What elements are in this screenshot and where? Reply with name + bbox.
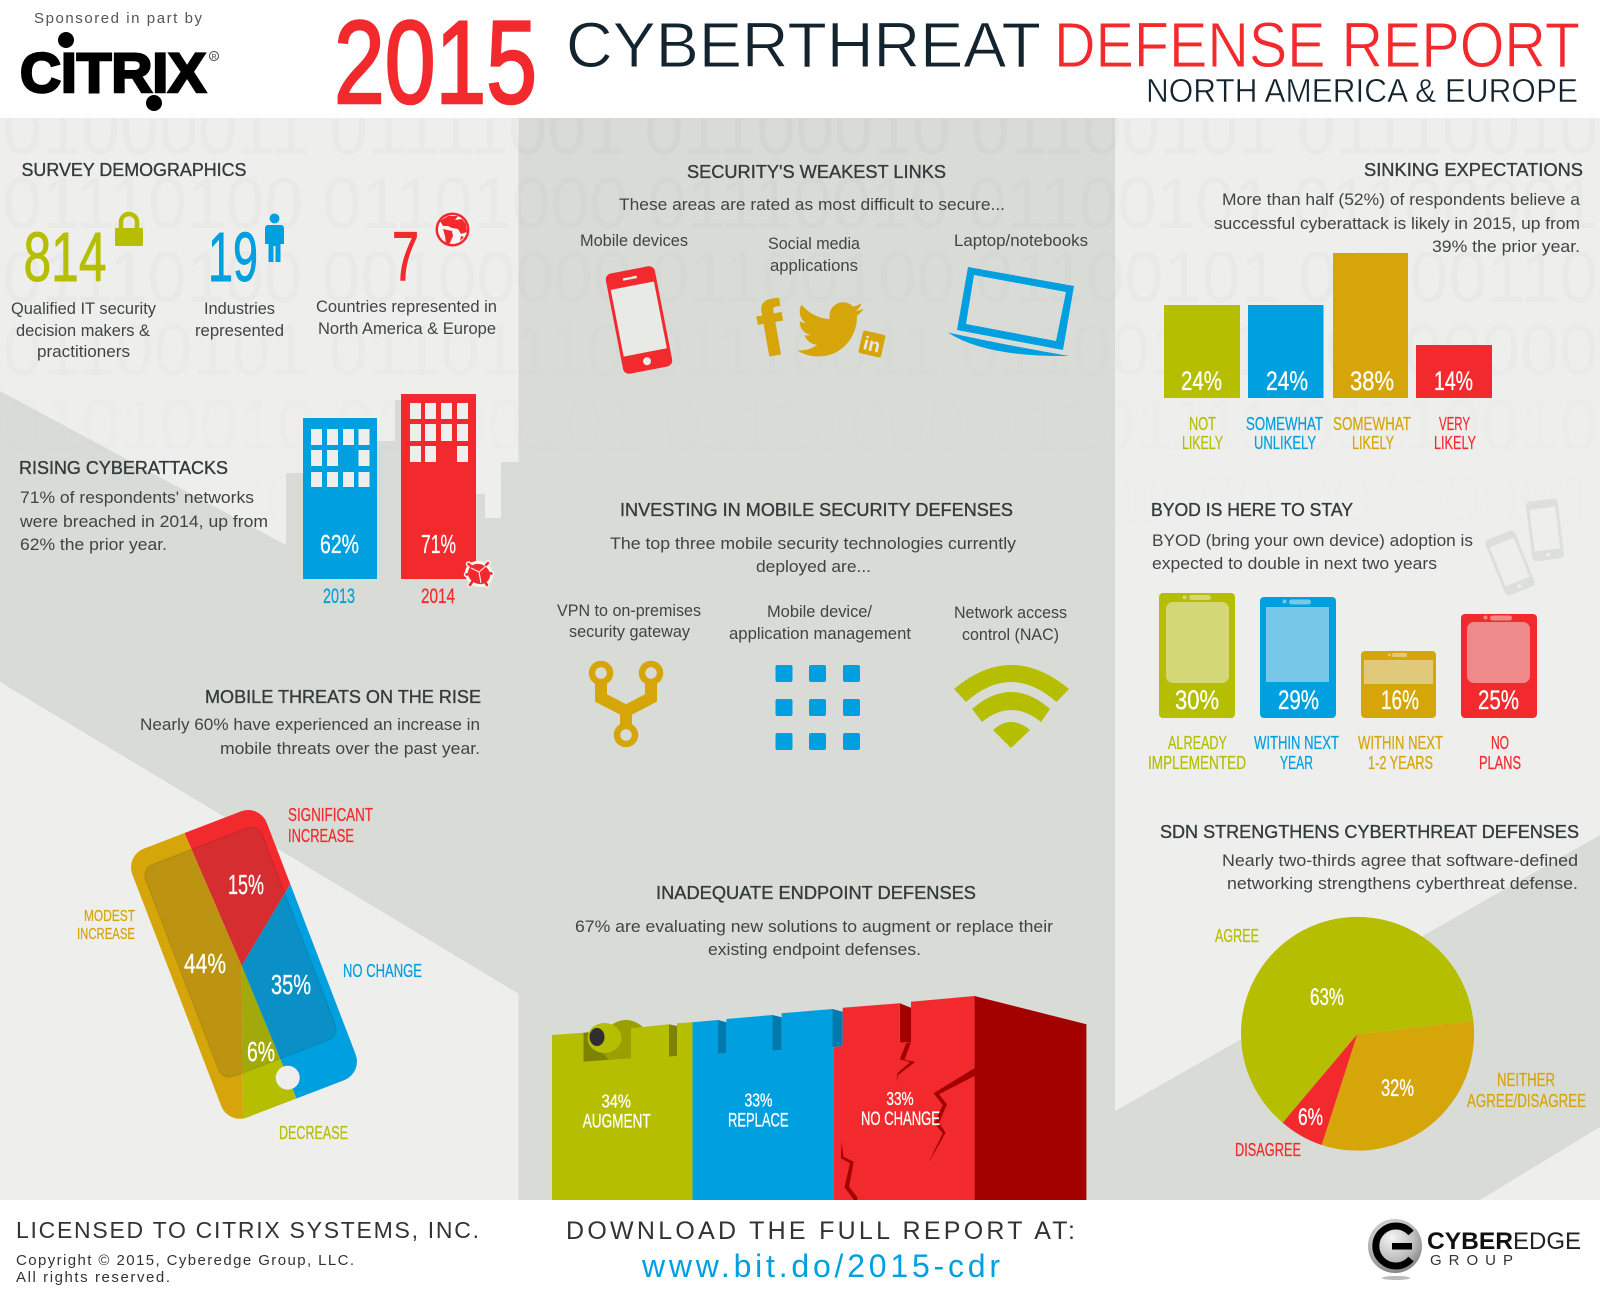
bar: somewhat likely: SOMEWHAT xyxy=(1333,414,1411,434)
bar: 2013 building xyxy=(303,418,377,579)
caption: 814: decision makers & xyxy=(16,321,151,340)
icon: vpn gateway xyxy=(592,664,660,744)
pie chart xyxy=(1241,917,1474,1151)
body text: mobile threats over the past year. xyxy=(220,739,480,758)
intro text: 67% are evaluating new solutions to augment or replace their xyxy=(575,917,1053,936)
bar: no plans: PLANS xyxy=(1479,753,1521,773)
body text xyxy=(19,488,268,554)
footer: download call to action xyxy=(566,1217,1075,1284)
wall: augment: AUGMENT xyxy=(583,1112,651,1133)
bar: not likely xyxy=(1164,305,1240,453)
bar: already implemented: IMPLEMENTED xyxy=(1148,753,1246,773)
citrix logo: CITRIX xyxy=(20,41,206,104)
icon: app grid xyxy=(776,665,860,750)
body text: Nearly two-thirds agree that software-defined xyxy=(1222,851,1578,870)
binary background pattern on grey areas: 01110100 01101000 01110010 01100101 01100001 xyxy=(3,164,1598,244)
wall: no change: NO CHANGE xyxy=(861,1109,940,1130)
intro text xyxy=(610,534,1017,576)
caption: 814: Qualified IT security xyxy=(11,299,156,318)
bar: already implemented: ALREADY xyxy=(1168,733,1227,753)
label: nac: Network access xyxy=(954,603,1067,622)
label: no change: NO CHANGE xyxy=(343,961,422,981)
stat: 19: 19 xyxy=(208,218,258,296)
footer: cyberedge logo: EDGE xyxy=(1513,1228,1581,1255)
pie chart: 63% xyxy=(1310,984,1344,1011)
binary background pattern on grey areas xyxy=(22,402,108,449)
label: mdm: Mobile device/ xyxy=(767,602,872,621)
label: mobile devices: Mobile devices xyxy=(580,231,688,250)
body text: 39% the prior year. xyxy=(1432,237,1580,256)
icon: lock xyxy=(115,214,143,246)
bar: not likely: LIKELY xyxy=(1182,433,1223,453)
bar: somewhat unlikely: SOMEWHAT xyxy=(1246,414,1323,434)
bar: already implemented: 30% xyxy=(1175,685,1219,715)
body text xyxy=(1152,531,1473,573)
caption: 814: practitioners xyxy=(37,342,130,361)
icon: bug xyxy=(464,560,494,588)
label: mdm: application management xyxy=(729,624,911,643)
wall: augment xyxy=(552,1020,692,1200)
heading: INADEQUATE ENDPOINT DEFENSES xyxy=(656,882,976,903)
citrix logo: R xyxy=(212,54,217,61)
chart: phone-shaped pie: 15% xyxy=(228,869,264,900)
body text: 71% of respondents' networks xyxy=(20,488,254,507)
heading: SECURITY'S WEAKEST LINKS xyxy=(687,161,946,182)
label: agree: AGREE xyxy=(1215,926,1259,946)
footer: license: Copyright © 2015, Cyberedge Group, LLC. xyxy=(16,1252,354,1269)
chart: phone-shaped pie: 35% xyxy=(271,969,311,1000)
binary background pattern on light areas: 01000011 01111001 01100010 01100101 01110010 xyxy=(3,90,1598,170)
bar: within next year xyxy=(1254,597,1339,773)
body text: were breached in 2014, up from xyxy=(19,512,268,531)
bar: no plans: NO xyxy=(1491,733,1509,753)
footer: license: LICENSED TO CITRIX SYSTEMS, INC. xyxy=(16,1217,479,1243)
footer: cyberedge logo: CYBER xyxy=(1427,1228,1513,1255)
label: vpn xyxy=(557,601,701,641)
heading: INVESTING IN MOBILE SECURITY DEFENSES xyxy=(620,499,1013,520)
panel: investing in mobile security defenses xyxy=(557,499,1069,750)
intro text xyxy=(575,917,1053,959)
bar: already implemented xyxy=(1148,593,1246,773)
intro text: deployed are... xyxy=(756,557,871,576)
heading: rising cyberattacks: RISING CYBERATTACKS xyxy=(19,457,228,478)
label: neither xyxy=(1467,1070,1586,1111)
label: modest increase: MODEST xyxy=(84,908,135,925)
bar: 2014 building: 71% xyxy=(421,529,456,559)
footer: license xyxy=(16,1217,479,1286)
bar: somewhat likely: 38% xyxy=(1350,366,1394,396)
bar: very likely: LIKELY xyxy=(1434,433,1476,453)
footer: cyberedge logo xyxy=(1368,1219,1581,1280)
footer: download call to action: DOWNLOAD THE FULL REPORT AT: xyxy=(566,1217,1075,1245)
stat: 814: 814 xyxy=(24,218,106,296)
icon: person xyxy=(265,214,284,262)
bar: within next year: 29% xyxy=(1278,685,1319,715)
binary background pattern on light areas: 01110100 01101000 01110010 01100101 01100001 xyxy=(3,164,1598,244)
header band xyxy=(0,0,1600,118)
bar: very likely xyxy=(1416,345,1492,453)
icon: ghost phones xyxy=(1484,498,1565,597)
binary background pattern on grey areas: 01000011 01111001 01100010 01100101 01110010 xyxy=(3,90,1598,170)
bar: not likely: 24% xyxy=(1181,366,1222,396)
label: social media applications: applications xyxy=(770,256,858,275)
pie chart: 6% xyxy=(1298,1104,1323,1131)
caption: 7 xyxy=(316,297,497,338)
label: significant increase xyxy=(288,805,373,846)
label: laptop notebooks: Laptop/notebooks xyxy=(954,231,1088,250)
icon: globe xyxy=(436,212,470,246)
label: vpn: security gateway xyxy=(569,622,690,641)
bar: somewhat likely xyxy=(1333,253,1411,453)
label: significant increase: SIGNIFICANT xyxy=(288,805,373,825)
bar: no plans: 25% xyxy=(1478,685,1519,715)
icon: laptop xyxy=(948,267,1074,356)
footer: download call to action: www.bit.do/2015-cdr xyxy=(641,1248,1000,1284)
caption: 7: Countries represented in xyxy=(316,297,497,316)
label: 2014: 2014 xyxy=(421,585,455,608)
label: disagree: DISAGREE xyxy=(1235,1140,1301,1160)
body text xyxy=(140,715,480,758)
icon: smartphone xyxy=(605,265,673,375)
panel: rising cyberattacks xyxy=(19,394,494,608)
binary background pattern on grey areas: 01010010 01100101 01110000 01101111 01110010 xyxy=(3,386,1598,466)
binary background pattern on light areas: 01100101 01101110 01110011 01100101 00100000 xyxy=(3,311,1598,391)
bar: very likely: VERY xyxy=(1439,414,1470,434)
heading: SINKING EXPECTATIONS xyxy=(1364,159,1583,180)
bar: within next 1-2 years: WITHIN NEXT xyxy=(1358,733,1443,753)
body text: More than half (52%) of respondents believe a xyxy=(1222,190,1581,209)
label: social media applications: Social media xyxy=(768,234,861,253)
panel: survey demographics xyxy=(11,159,497,361)
wall: replace: 33% xyxy=(744,1091,772,1111)
label: mdm xyxy=(729,602,911,643)
title xyxy=(334,0,1580,129)
label: vpn: VPN to on-premises xyxy=(557,601,701,620)
chart: phone-shaped pie xyxy=(131,810,357,1119)
label: modest increase xyxy=(77,908,135,943)
body text: networking strengthens cyberthreat defense. xyxy=(1227,874,1578,893)
bar: somewhat likely: LIKELY xyxy=(1352,433,1394,453)
label: decrease: DECREASE xyxy=(279,1123,348,1143)
panel: inadequate endpoint defenses xyxy=(552,882,1086,1200)
label: modest increase: INCREASE xyxy=(77,926,135,943)
wall: replace xyxy=(692,1009,843,1200)
stat: 7: 7 xyxy=(392,217,419,295)
panel: security's weakest links xyxy=(580,161,1088,375)
footer: license: All rights reserved. xyxy=(16,1269,170,1286)
binary background pattern on light areas: 01010010 01100101 01110000 01101111 01110010 xyxy=(3,386,1598,466)
title: CYBERTHREAT xyxy=(566,9,1041,81)
bar: not likely: NOT xyxy=(1189,414,1216,434)
panel: sdn xyxy=(1160,821,1586,1160)
bar: within next 1-2 years xyxy=(1358,651,1443,773)
wall: replace: REPLACE xyxy=(728,1111,788,1132)
chart: phone-shaped pie: 6% xyxy=(247,1036,275,1067)
heading: SDN STRENGTHENS CYBERTHREAT DEFENSES xyxy=(1160,821,1579,842)
icon: social media xyxy=(751,285,886,374)
bar: within next 1-2 years: 1-2 YEARS xyxy=(1368,753,1433,773)
caption: 814 xyxy=(11,299,156,361)
bar: very likely: 14% xyxy=(1434,366,1473,396)
heading: mobile threats: MOBILE THREATS ON THE RISE xyxy=(205,686,481,707)
label: significant increase: INCREASE xyxy=(288,826,354,846)
icon: social media: in xyxy=(861,333,882,358)
heading: survey demographics: SURVEY DEMOGRAPHICS xyxy=(22,159,246,180)
bar: 2014 building xyxy=(401,394,476,579)
panel: byod xyxy=(1148,498,1565,773)
body text: BYOD (bring your own device) adoption is xyxy=(1152,531,1473,550)
caption: 19: represented xyxy=(195,321,284,340)
panel: mobile threats on the rise xyxy=(77,686,481,1143)
bar: within next 1-2 years: 16% xyxy=(1381,685,1419,715)
label: social media applications xyxy=(768,234,861,275)
bar: no plans xyxy=(1461,614,1537,773)
wall: no change: 33% xyxy=(886,1089,914,1109)
pie chart: 32% xyxy=(1381,1075,1414,1102)
intro text: These areas are rated as most difficult to secure... xyxy=(619,195,1005,214)
footer band xyxy=(0,1200,1600,1300)
bar: somewhat unlikely: 24% xyxy=(1266,366,1308,396)
body text xyxy=(1214,190,1581,256)
intro text: existing endpoint defenses. xyxy=(708,940,921,959)
icon: wifi xyxy=(954,665,1069,748)
binary background pattern on light areas xyxy=(3,90,1598,540)
bar: somewhat unlikely: UNLIKELY xyxy=(1254,433,1316,453)
wall: augment: 34% xyxy=(602,1092,631,1112)
binary background pattern on grey areas: 01100101 01101110 01110011 01100101 00100000 xyxy=(3,311,1598,391)
wall: no change xyxy=(834,996,1086,1200)
body text: successful cyberattack is likely in 2015, up from xyxy=(1214,214,1580,233)
bar: within next year: WITHIN NEXT xyxy=(1254,733,1339,753)
label: 2013: 2013 xyxy=(323,585,355,608)
intro text: The top three mobile security technologies currently xyxy=(610,534,1017,553)
body text: Nearly 60% have experienced an increase in xyxy=(140,715,480,734)
caption: 19 xyxy=(195,299,284,340)
bar: within next year: YEAR xyxy=(1280,753,1313,773)
body text: 62% the prior year. xyxy=(20,535,167,554)
icon: social media: f xyxy=(751,285,791,374)
heading: BYOD IS HERE TO STAY xyxy=(1151,499,1353,520)
label: nac: control (NAC) xyxy=(962,625,1059,644)
caption: 7: North America & Europe xyxy=(318,319,496,338)
footer: cyberedge logo: GROUP xyxy=(1430,1252,1513,1269)
label: nac xyxy=(954,603,1067,644)
body text: expected to double in next two years xyxy=(1152,554,1437,573)
title: NORTH AMERICA & EUROPE xyxy=(1146,72,1578,109)
sponsor block xyxy=(20,10,218,111)
bar: somewhat unlikely xyxy=(1246,305,1324,453)
bar: 2013 building: 62% xyxy=(320,529,359,559)
chart: phone-shaped pie: 44% xyxy=(184,948,226,979)
title: 2015 xyxy=(334,0,537,129)
body text xyxy=(1222,851,1578,893)
sponsor caption: Sponsored in part by xyxy=(34,10,202,27)
label: neither: NEITHER xyxy=(1497,1070,1555,1090)
caption: 19: Industries xyxy=(204,299,275,318)
panel: sinking expectations xyxy=(1164,159,1583,453)
